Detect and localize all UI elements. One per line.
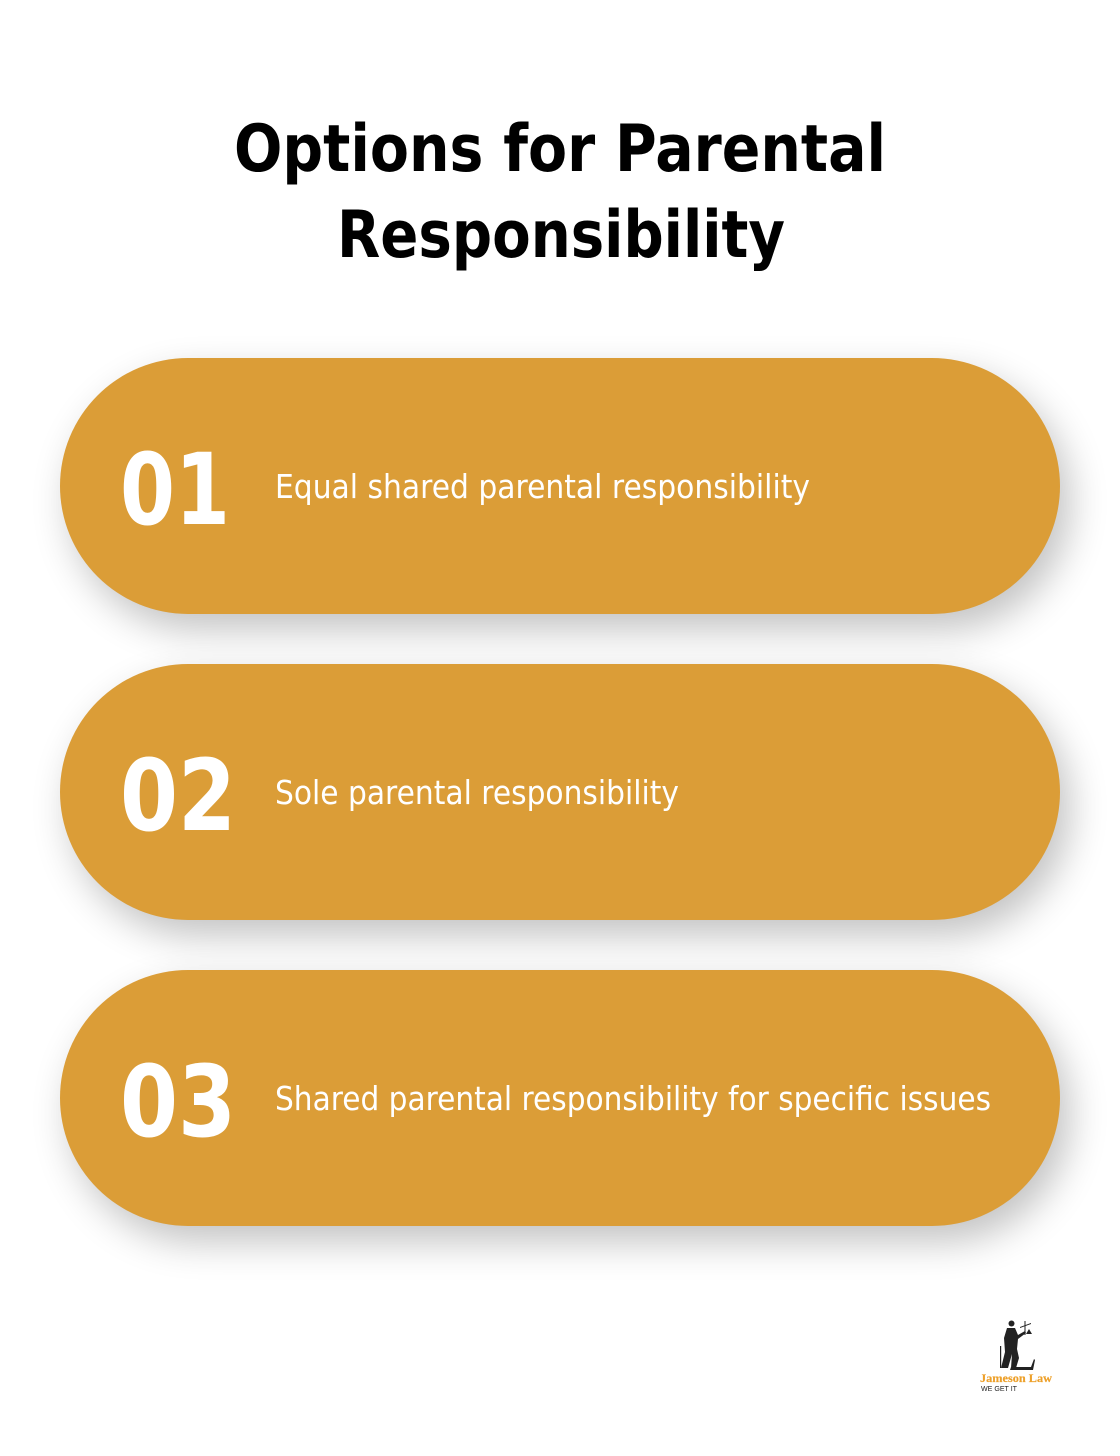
- panel: option 3 pill: [60, 970, 1060, 1226]
- option 2 content: [120, 739, 679, 854]
- icon: lady justice: [1000, 1320, 1035, 1370]
- logo wordmark: Jameson Law: [980, 1373, 1053, 1385]
- label: sole: Sole parental responsibility: [275, 773, 679, 812]
- title: [234, 112, 886, 273]
- label: equal shared: Equal shared parental responsibility: [275, 467, 810, 506]
- title: Options for Parental: [234, 112, 886, 187]
- option 1 content: [120, 433, 810, 548]
- label: shared specific: Shared parental responsibility for specific issues: [275, 1079, 991, 1118]
- panel: option 2 pill: [60, 664, 1060, 920]
- logo: Jameson Law: [980, 1320, 1053, 1393]
- title: Responsibility: [337, 198, 785, 273]
- option 3 content: [120, 1045, 991, 1160]
- panel: option 1 pill: [60, 358, 1060, 614]
- number 01: 01: [120, 433, 230, 548]
- logo tagline: WE GET IT: [981, 1386, 1018, 1393]
- number 03: 03: [120, 1045, 236, 1160]
- number 02: 02: [120, 739, 236, 854]
